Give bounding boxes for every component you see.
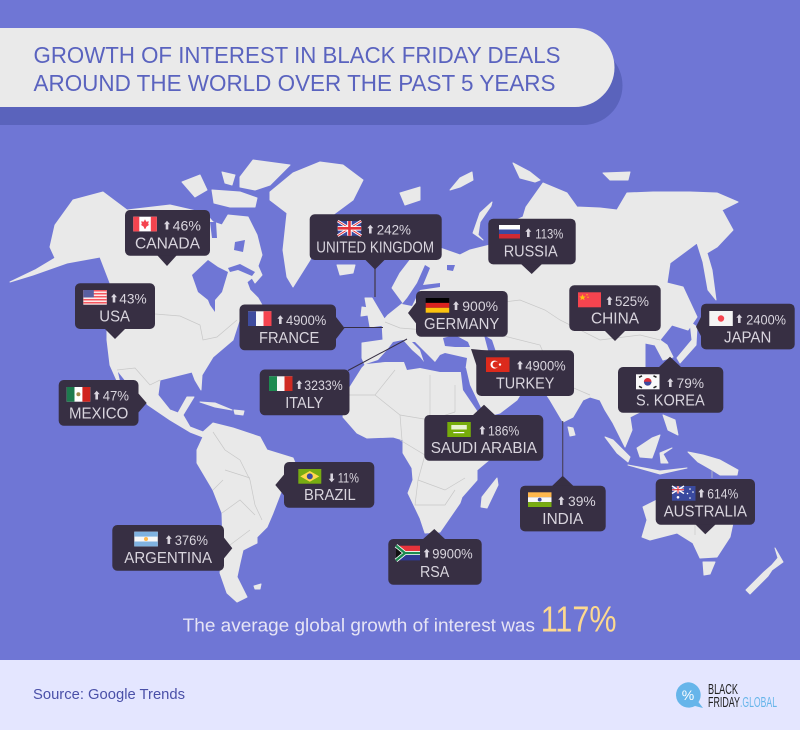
average growth statement: The average global growth of interest was	[183, 614, 535, 636]
callout: Saudi Arabia	[424, 405, 543, 461]
flag: South Korea	[636, 374, 660, 389]
footer	[0, 660, 800, 730]
callout: Australia: AUSTRALIA	[664, 504, 748, 520]
logo: FRIDAY	[708, 694, 740, 711]
flag: Argentina	[134, 532, 158, 546]
flag: United Kingdom	[338, 221, 361, 236]
callout: RSA: RSA	[420, 564, 450, 581]
callout: RSA	[388, 529, 482, 585]
flag: Brazil	[298, 469, 321, 484]
flag: Canada	[133, 217, 157, 231]
callout: Japan	[696, 304, 795, 349]
title text	[34, 42, 560, 96]
Eurasia and Africa landmass	[343, 183, 738, 533]
callout: Italy: 3233%	[304, 378, 343, 393]
North and South America landmass	[10, 192, 298, 602]
logo: %	[682, 687, 694, 703]
callout: USA: USA	[99, 308, 131, 326]
callout: Germany	[408, 291, 508, 337]
world map	[10, 160, 783, 602]
callout: Brazil: 11%	[338, 470, 359, 486]
flag: Germany	[426, 298, 449, 313]
callout: India: INDIA	[542, 511, 584, 528]
callout: France: 4900%	[286, 313, 326, 328]
callout: Mexico	[59, 380, 147, 426]
flag: France	[248, 311, 272, 326]
Arctic islands	[182, 160, 355, 275]
callout: Turkey: 4900%	[525, 358, 566, 374]
Japan	[677, 322, 697, 363]
logo	[676, 681, 777, 711]
flag: Mexico	[67, 387, 90, 402]
callout: South Korea: S. KOREA	[636, 392, 705, 410]
source: Source: Google Trends	[33, 687, 185, 703]
callout: Brazil: BRAZIL	[304, 487, 356, 504]
callout: Italy: ITALY	[285, 395, 323, 412]
callout: United Kingdom: UNITED KINGDOM	[316, 240, 434, 256]
callout: Australia	[656, 479, 755, 534]
flag: Turkey	[486, 357, 510, 372]
Arctic channels	[210, 222, 255, 276]
callout: China: 525%	[615, 294, 649, 309]
callout: India: 39%	[568, 494, 596, 509]
callout: France: FRANCE	[259, 330, 319, 347]
callout: Argentina: ARGENTINA	[124, 550, 213, 567]
Greenland	[270, 162, 363, 287]
callout: Canada	[125, 210, 210, 266]
callout: Russia: RUSSIA	[504, 244, 558, 260]
callout: USA	[75, 283, 155, 339]
flag: Japan	[709, 311, 733, 326]
Australia and New Zealand	[642, 480, 783, 594]
title text: AROUND THE WORLD OVER THE PAST 5 YEARS	[34, 70, 556, 96]
Sri Lanka and Madagascar	[481, 427, 575, 508]
callout: China	[569, 285, 661, 341]
callout: United Kingdom	[310, 214, 442, 297]
callout: Japan: JAPAN	[724, 330, 771, 346]
callout: Saudi Arabia: 186%	[488, 424, 519, 438]
average growth statement	[183, 598, 616, 640]
callout: Canada: 46%	[173, 218, 201, 233]
flag: South Africa	[396, 546, 420, 560]
Hudson Bay	[192, 260, 228, 312]
callout: Italy	[260, 339, 407, 415]
flag: USA	[83, 290, 107, 305]
Southeast Asian islands	[605, 415, 738, 475]
callout: Japan: 2400%	[746, 312, 786, 328]
flag: India	[528, 492, 552, 507]
callout: Germany: GERMANY	[424, 316, 499, 333]
flag: China	[578, 292, 601, 307]
callout: Australia: 614%	[707, 486, 738, 502]
callout: India	[520, 421, 606, 531]
title text: GROWTH OF INTEREST IN BLACK FRIDAY DEALS	[34, 42, 560, 68]
Arctic Eurasian islands	[400, 163, 630, 240]
flag: Italy	[269, 376, 292, 391]
callout: Russia	[488, 219, 576, 274]
callout: RSA: 9900%	[432, 546, 473, 562]
title banner	[0, 28, 622, 125]
callout: Argentina: 376%	[175, 533, 208, 548]
inland seas	[402, 265, 497, 412]
callout: Canada: CANADA	[135, 235, 201, 252]
callout: South Korea	[618, 357, 723, 413]
callout: France	[240, 304, 383, 350]
callout: Turkey: TURKEY	[496, 376, 554, 392]
callout: Russia: 113%	[535, 226, 563, 242]
callout: USA: 43%	[119, 292, 147, 306]
logo: BLACK	[708, 681, 738, 698]
callout: Mexico: MEXICO	[69, 406, 128, 422]
callout: Mexico: 47%	[103, 388, 129, 404]
flag: Saudi Arabia	[447, 422, 471, 437]
callout: Turkey	[471, 349, 574, 396]
callout: Argentina	[112, 525, 232, 571]
flag: Australia	[672, 486, 696, 501]
callout: Germany: 900%	[462, 299, 498, 314]
callout: Saudi Arabia: SAUDI ARABIA	[431, 440, 538, 457]
British Isles	[361, 298, 385, 327]
flag: Russia	[499, 225, 520, 238]
highlighted figure: 117%	[541, 598, 616, 640]
callout: South Korea: 79%	[677, 376, 704, 391]
callout: Brazil	[275, 462, 374, 508]
Caribbean and Falkland islands	[200, 402, 261, 589]
Mediterranean Sea	[366, 340, 467, 372]
callout: United Kingdom: 242%	[377, 222, 411, 238]
callout: China: CHINA	[591, 310, 640, 328]
